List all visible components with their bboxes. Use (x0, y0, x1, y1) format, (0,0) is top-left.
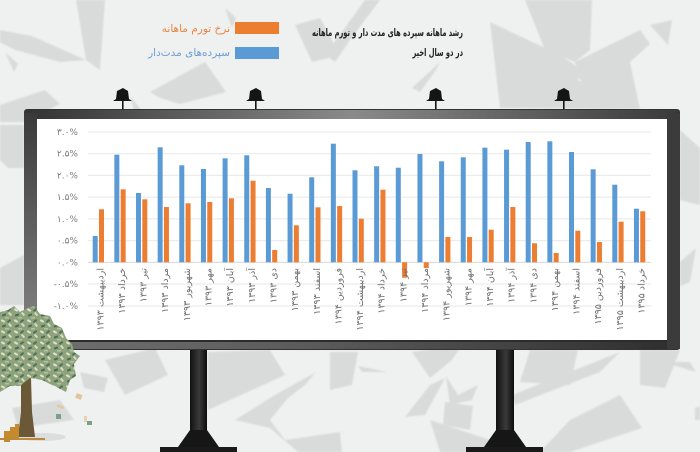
x axis month labels: مهر ۱۳۹۳ (204, 268, 214, 306)
title (312, 28, 463, 60)
x axis month labels: آذر ۱۳۹۴ (505, 268, 518, 303)
series: term deposits (blue bars) (93, 141, 639, 262)
legend: term deposits: سپرده‌های مدت‌دار (147, 47, 230, 59)
x axis month labels: بهمن ۱۳۹۴ (550, 268, 561, 311)
gold coins (0, 424, 45, 442)
x axis month labels: دی ۱۳۹۴ (528, 268, 539, 303)
y axis labels: ۱.۵% (57, 193, 78, 203)
billboard screen (37, 119, 667, 340)
y axis labels: ۰.۰% (57, 258, 78, 268)
x axis month labels: آبان ۱۳۹۳ (223, 268, 236, 307)
tree canopy (0, 306, 80, 392)
x axis month labels (95, 268, 648, 331)
tree trunk (18, 378, 35, 437)
x axis month labels: شهریور ۱۳۹۳ (182, 268, 193, 321)
tree shadow (18, 433, 66, 441)
x axis month labels: تیر ۱۳۹۳ (139, 268, 150, 302)
x axis month labels: آبان ۱۳۹۴ (483, 268, 496, 307)
billboard lamps (113, 88, 573, 109)
x axis month labels: مهر ۱۳۹۴ (463, 268, 474, 306)
lamp 3 (426, 88, 445, 109)
y axis labels: ۰.۵% (57, 237, 78, 247)
x axis month labels: بهمن ۱۳۹۳ (290, 268, 301, 311)
x axis month labels: اسفند ۱۳۹۴ (572, 268, 583, 315)
falling bills (56, 393, 92, 425)
billboard: left pole (160, 349, 237, 452)
x axis month labels: فروردین ۱۳۹۴ (333, 268, 344, 325)
x axis month labels: آذر ۱۳۹۳ (245, 268, 258, 303)
grid lines (88, 132, 651, 306)
x axis month labels: فروردین ۱۳۹۵ (593, 268, 604, 325)
money tree (0, 306, 92, 442)
y axis labels: -۱.۰% (54, 302, 78, 312)
y axis labels: ۲.۵% (57, 150, 78, 160)
x axis month labels: اردیبهشت ۱۳۹۳ (95, 268, 106, 331)
x axis month labels: اردیبهشت ۱۳۹۵ (615, 268, 626, 331)
y axis labels: ۲.۰% (57, 171, 78, 181)
x axis month labels: تیر ۱۳۹۴ (398, 268, 409, 302)
x axis month labels: دی ۱۳۹۳ (268, 268, 280, 303)
billboard: right pole (466, 349, 543, 452)
billboard frame (24, 109, 680, 350)
legend (147, 22, 279, 59)
title: رشد ماهانه سپرده های مدت دار و تورم ماهانه (312, 28, 463, 40)
y axis labels: ۳.۰% (57, 128, 78, 138)
lamp 4 (554, 88, 573, 109)
x axis month labels: اردیبهشت ۱۳۹۴ (355, 268, 366, 331)
y axis labels (54, 128, 78, 312)
x axis month labels: خرداد ۱۳۹۵ (636, 268, 648, 314)
series: monthly inflation (orange bars) (99, 181, 645, 278)
title: در دو سال اخیر (412, 48, 463, 60)
x axis month labels: مرداد ۱۳۹۳ (160, 268, 171, 313)
y axis labels: -۰.۵% (54, 280, 78, 290)
x axis month labels: خرداد ۱۳۹۳ (117, 268, 128, 314)
y axis labels: ۱.۰% (57, 215, 78, 225)
x axis month labels: شهریور ۱۳۹۴ (442, 268, 453, 321)
legend: monthly inflation: نرخ تورم ماهانه (162, 23, 230, 35)
lamp 2 (246, 88, 265, 109)
x axis month labels: مرداد ۱۳۹۴ (420, 268, 431, 313)
x axis month labels: اسفند ۱۳۹۳ (312, 268, 323, 315)
lamp 1 (113, 88, 132, 109)
x axis month labels: خرداد ۱۳۹۴ (377, 268, 388, 314)
